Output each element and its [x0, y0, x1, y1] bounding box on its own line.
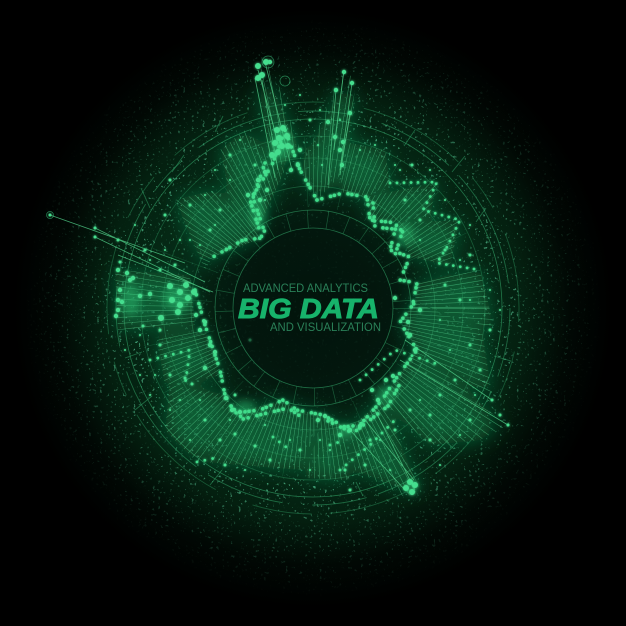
subtitle: and visualization: AND VISUALIZATION: [270, 321, 381, 334]
green data band glow: [115, 85, 500, 490]
title block: [238, 282, 381, 334]
node halo rings: [46, 56, 290, 218]
large data nodes: [50, 62, 508, 492]
concentric grid rings: [124, 119, 502, 497]
soft bright clusters: [120, 129, 418, 494]
long spike lines: [50, 62, 508, 490]
headline: big data: BIG DATA: [238, 293, 379, 324]
jagged dotted inner ridge: [150, 130, 480, 470]
radial data lines: [148, 143, 478, 473]
subtitle: advanced analytics: ADVANCED ANALYTICS: [243, 282, 368, 295]
centre disc: [234, 229, 392, 387]
